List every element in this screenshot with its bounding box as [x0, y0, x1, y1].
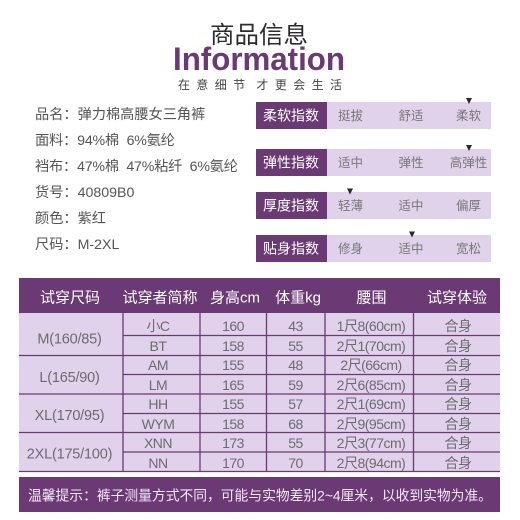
table rows: LM	[149, 377, 167, 393]
panel: fit index: 贴身指数	[263, 240, 319, 256]
table rows: 2尺1(70cm)	[337, 338, 405, 354]
table rows: 合身	[444, 435, 472, 451]
table rows: 2尺1(69cm)	[337, 396, 405, 412]
title: Information	[173, 41, 345, 77]
table rows	[142, 318, 472, 471]
table rows: 1尺8(60cm)	[337, 318, 405, 334]
table rows: 小C	[146, 318, 170, 334]
panel: fit index: 宽松	[456, 241, 481, 256]
panel: elasticity index: 弹性	[398, 156, 424, 170]
table header: 试穿尺码	[40, 290, 100, 306]
product specification list: 面料：94%棉 6%氨纶	[35, 132, 175, 149]
table size column: L(165/90)	[39, 370, 100, 386]
table rows: HH	[148, 396, 168, 412]
table size column: 2XL(175/100)	[27, 446, 112, 462]
table rows: 48	[288, 357, 303, 373]
table grid lines	[19, 313, 500, 472]
table size column	[27, 332, 112, 462]
table rows: 59	[288, 377, 303, 393]
table header: 身高cm	[210, 290, 260, 306]
table rows: BT	[150, 338, 167, 354]
table rows: 155	[222, 357, 245, 373]
panel: thickness index: 适中	[398, 198, 424, 213]
callout: fitting note	[19, 477, 500, 512]
table rows: XNN	[144, 435, 172, 451]
panel: thickness index	[256, 188, 491, 219]
table rows: 55	[288, 338, 303, 354]
panel: elasticity index: 高弹性	[450, 155, 487, 170]
product specification list: 裆布：47%棉 47%粘纤 6%氨纶	[35, 158, 238, 175]
table rows: 165	[222, 377, 245, 393]
panel: thickness index: 偏厚	[456, 198, 481, 213]
table rows: 2尺9(95cm)	[337, 416, 405, 432]
table rows: 2尺8(94cm)	[337, 455, 405, 471]
panel: thickness index: 厚度指数	[263, 198, 319, 214]
table rows: 合身	[444, 396, 472, 412]
product specification list: 品名：弹力棉高腰女三角裤	[35, 106, 205, 123]
size fitting table	[19, 278, 500, 472]
product specification list: 货号：40809B0	[35, 185, 134, 201]
table rows: 55	[288, 435, 303, 451]
panel: fit index	[256, 232, 491, 262]
table rows: 合身	[444, 416, 472, 432]
table header: 试穿者简称	[122, 290, 198, 306]
table rows: 68	[288, 416, 303, 432]
table rows: NN	[148, 455, 168, 471]
panel: softness index: 柔软指数	[263, 108, 319, 124]
table header: 体重kg	[275, 290, 321, 306]
table rows: 57	[288, 396, 303, 412]
title: 商品信息	[210, 22, 308, 49]
product specification list: 颜色：紫红	[35, 210, 106, 227]
panel: softness index: 挺拔	[338, 108, 363, 123]
table rows: 160	[222, 318, 245, 334]
panel: thickness index: 轻薄	[338, 198, 363, 213]
table rows: WYM	[142, 416, 174, 432]
panel: elasticity index: 适中	[338, 155, 363, 170]
table size column: M(160/85)	[37, 332, 102, 348]
table rows: 158	[222, 338, 245, 354]
table header: 腰围	[356, 290, 387, 306]
table rows: 70	[288, 455, 303, 471]
table rows: 2尺3(77cm)	[337, 435, 405, 451]
panel: softness index: 柔软	[456, 109, 481, 123]
table header	[19, 278, 500, 313]
table header: 试穿体验	[427, 290, 487, 306]
panel: softness index	[256, 98, 491, 129]
table rows: 2尺(66cm)	[340, 357, 402, 373]
title: 在 意 细 节 才 更 会 生 活	[178, 77, 342, 92]
table rows: 155	[222, 396, 245, 412]
table rows: 合身	[444, 318, 472, 334]
title	[173, 22, 345, 92]
panel: elasticity index: 弹性指数	[263, 154, 319, 170]
panel: softness index: 舒适	[398, 109, 424, 123]
table rows: 合身	[444, 455, 472, 471]
table rows: 合身	[444, 338, 472, 354]
table rows: 合身	[444, 357, 472, 373]
table rows: 2尺6(85cm)	[337, 377, 405, 393]
table size column: XL(170/95)	[35, 408, 104, 424]
table rows: 合身	[444, 377, 472, 393]
table rows: 158	[222, 416, 245, 432]
panel: fit index: 修身	[338, 241, 363, 256]
product specification list: 尺码：M-2XL	[35, 237, 119, 253]
table rows: AM	[148, 357, 168, 373]
product specification list	[35, 106, 238, 253]
table rows: 43	[288, 318, 303, 334]
table rows: 170	[222, 455, 245, 471]
panel: fit index: 适中	[398, 241, 424, 256]
callout: fitting note: 温馨提示：裤子测量方式不同，可能与实物差别2~4厘米，以收到实物为准。	[28, 488, 492, 504]
panel: elasticity index	[256, 145, 491, 176]
table rows: 173	[222, 435, 245, 451]
